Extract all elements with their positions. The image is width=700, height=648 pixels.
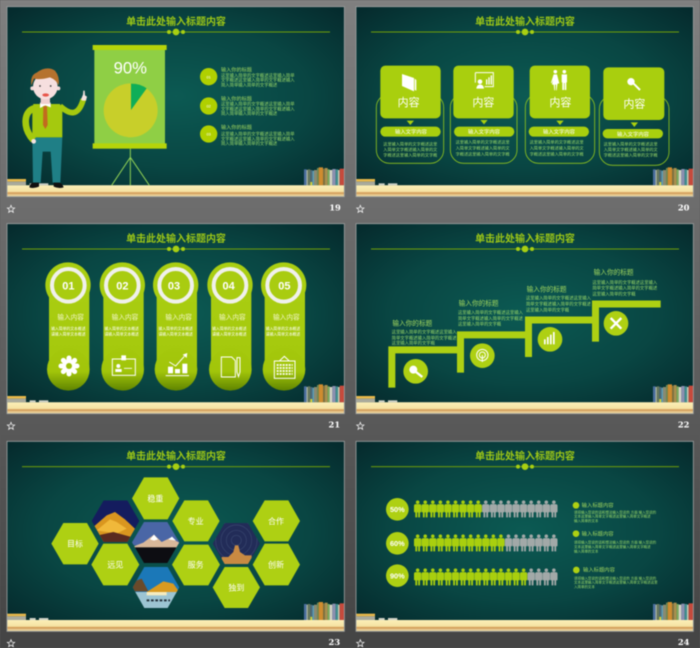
- title: 单击此处输入标题内容: [475, 232, 575, 245]
- hexagon: 创新: 创新: [268, 560, 284, 570]
- list item 03: 输入你的标题: [221, 123, 252, 131]
- card 4: 这里输入简单的文字概述这里: [604, 140, 658, 146]
- list item 01: 输入你的标题: [221, 65, 252, 73]
- pictogram row 50%: 50%: [390, 505, 405, 514]
- step 4: 简单文字概述输入简单的文字概述: [592, 285, 658, 292]
- illustration: teacher: [26, 68, 87, 188]
- pill 01: 输入内容: [57, 312, 84, 321]
- pill 03: 请输入简单文本概述: [158, 332, 193, 337]
- legend 2: 请将输入您说的话和想法输入您说的 方面 输入您说的: [574, 540, 657, 545]
- title: 单击此处输入标题内容: [126, 232, 226, 245]
- photo: lake: [133, 567, 179, 608]
- step 3: 输入你的标题: [527, 284, 567, 293]
- icon: star: [357, 205, 364, 212]
- legend 2: 输入标题内容: [582, 529, 614, 537]
- pill 01: 请输入简单文本概述: [51, 332, 86, 337]
- photo: star trails temple: [213, 520, 260, 564]
- list item 02: 简入简单输入简单的文字概述: [221, 110, 278, 117]
- step 3: 这里输入简单的文字概述这里输入: [526, 295, 592, 302]
- card 4: 内容: [623, 97, 645, 111]
- legend 1: [573, 501, 657, 523]
- hexagon: 独到: [213, 567, 260, 608]
- card 4: [599, 67, 669, 165]
- legend 2: 输入简单的文本: [574, 548, 599, 553]
- legend 1: 文本这里输入简单文字概述这里输入简单文字概述: [574, 514, 651, 519]
- panel: slide 21 five pills: [7, 224, 344, 430]
- pill 04: 输入简单的文本概述: [212, 326, 247, 331]
- step 4: 输入你的标题: [594, 268, 634, 277]
- title: 单击此处输入标题内容: [475, 449, 575, 462]
- pill 02: 02: [116, 280, 128, 292]
- pill 04: 输入内容: [219, 312, 246, 321]
- hexagon: 服务: [172, 545, 220, 585]
- card 1: 这里输入简单的文字概述这里: [383, 140, 437, 146]
- card 2: 入简单文字概述输入简单的文: [456, 145, 510, 151]
- card 1: 入简单文字概述输入简单的文: [383, 146, 437, 152]
- step 1: [392, 318, 457, 384]
- list item 01: 01: [206, 74, 212, 79]
- card 2: 内容: [472, 95, 494, 109]
- list item 03: [200, 123, 295, 147]
- step 4: [592, 268, 658, 336]
- pill 03: 03: [168, 280, 180, 292]
- hexagon: 专业: [172, 500, 220, 541]
- step 3: 这里输入简单的文字概: [526, 306, 570, 313]
- staircase line: [392, 304, 661, 388]
- step 4: 这里输入简单的文字概述这里输入: [592, 279, 658, 286]
- pictogram row 60%: 60%: [390, 539, 405, 548]
- icon: star: [357, 640, 364, 647]
- page number: 19: [329, 202, 341, 212]
- pill 04: [207, 262, 253, 391]
- card 3: 这里输入简单的文字概述这里: [530, 139, 584, 145]
- card 3: 内容: [549, 95, 571, 109]
- list item 03: 03: [206, 132, 212, 137]
- list item 03: 这里输入简单的文字概述这里输入简单: [221, 131, 295, 138]
- hexagon: 创新: [253, 544, 300, 585]
- pill 03: [153, 262, 198, 391]
- legend 3: 请将输入您说的话和想法输入您说的 方面 输入您说的: [574, 575, 657, 580]
- hexagon: 目标: 目标: [67, 539, 83, 549]
- page number: 22: [678, 420, 690, 430]
- title: 单击此处输入标题内容: [126, 15, 226, 28]
- pill 01: 01: [62, 280, 74, 292]
- icon: star: [7, 422, 15, 429]
- pill 05: 请输入简单文本概述: [266, 332, 300, 337]
- photo: snow peaks: [132, 522, 179, 564]
- page number: 20: [678, 202, 690, 212]
- page number: 24: [678, 637, 690, 647]
- pill 02: [100, 262, 145, 391]
- card 1: 字概述这里输入简单的文字概: [383, 151, 437, 157]
- legend 2: 文本这里输入简单文字概述这里输入简单文字概述: [574, 544, 651, 549]
- icon: star: [357, 422, 364, 429]
- title: 单击此处输入标题内容: [475, 15, 575, 28]
- list item 01: [200, 65, 295, 88]
- hexagon: 目标: [51, 523, 99, 564]
- pill 03: 输入内容: [165, 312, 192, 321]
- step 2: 这里输入简单的文字概述这里输入: [458, 309, 524, 316]
- flip chart: 90%: [114, 59, 147, 78]
- photo: golden mountain: [92, 500, 139, 542]
- icon: star: [7, 640, 15, 647]
- hexagon: 稳重: [132, 477, 179, 519]
- list item 01: 简入简单输入简单的文字概述: [221, 81, 278, 88]
- pill 04: 请输入简单文本概述: [212, 332, 247, 337]
- card 2: 字概述这里输入简单的文字概: [456, 150, 510, 156]
- pill 02: 输入内容: [112, 312, 139, 321]
- icon: star: [7, 205, 15, 212]
- step 1: 这里输入简单的文字概: [392, 340, 436, 347]
- card 3: 入简单文字概述输入简单的文: [530, 145, 584, 151]
- legend 3: 输入标题内容: [583, 566, 616, 574]
- pill 01: [45, 262, 91, 391]
- card 4: 输入文字内容: [617, 130, 650, 138]
- pill 01: 输入简单的文本概述: [51, 326, 86, 331]
- list item 03: 简入简单输入简单的文字概述: [221, 140, 278, 147]
- hexagon: 远见: [91, 544, 139, 585]
- card 3: 字概述这里输入简单的文字概: [530, 150, 584, 156]
- card 4: 入简单文字概述输入简单的文: [604, 146, 658, 152]
- pictogram row 90%: [386, 564, 558, 587]
- card 3: [525, 66, 595, 163]
- title: 单击此处输入标题内容: [126, 449, 226, 462]
- hexagon: 专业: 专业: [188, 516, 204, 526]
- legend 2: [573, 529, 657, 553]
- pictogram row 90%: 90%: [390, 571, 405, 580]
- list item 01: 这里输入简单的文字概述这里输入简单: [221, 72, 295, 79]
- pictogram row 60%: [386, 532, 558, 555]
- panel: slide 24 pictogram chart: [356, 441, 693, 647]
- list item 02: 02: [206, 104, 212, 109]
- pill 04: 04: [223, 280, 236, 292]
- pill 03: 输入简单的文本概述: [158, 326, 193, 331]
- pill 05: 输入内容: [273, 312, 300, 321]
- step 3: [526, 284, 592, 352]
- panel: slide 20 four cards: [356, 7, 693, 212]
- step 4: 这里输入简单的文字概: [592, 290, 636, 297]
- card 1: 输入文字内容: [395, 128, 428, 136]
- hexagon: 独到: 独到: [228, 582, 244, 592]
- card 2: 输入文字内容: [468, 128, 501, 136]
- list item 02: [200, 94, 295, 117]
- card 4: 字概述这里输入简单的文字概: [604, 152, 658, 158]
- legend 1: 输入简单的文本: [574, 518, 599, 523]
- list item 02: 这里输入简单的文字概述这里输入简单: [221, 101, 295, 108]
- card 1: 内容: [398, 95, 420, 109]
- step 3: 简单文字概述输入简单的文字概述: [526, 301, 592, 308]
- page number: 21: [329, 420, 340, 430]
- pictogram row 50%: [386, 498, 558, 521]
- pill 02: 请输入简单文本概述: [104, 332, 139, 337]
- step 2: [458, 299, 524, 368]
- legend 1: 输入标题内容: [582, 501, 614, 509]
- card 2: [450, 66, 517, 163]
- panel: slide 22 staircase: [356, 224, 693, 430]
- card 2: 这里输入简单的文字概述这里: [456, 139, 510, 145]
- step 1: 简单文字概述输入简单的文字概述: [392, 334, 457, 341]
- legend 3: [573, 566, 658, 589]
- legend 3: 文本这里输入简单文字概述这里输入简单文字概述这里: [574, 580, 658, 585]
- flip chart: [93, 45, 167, 185]
- step 1: 这里输入简单的文字概述这里输入: [392, 329, 457, 336]
- legend 3: 入简单的文本: [574, 584, 595, 589]
- list item 03: 文字概述这里输入简单的文字概述输入: [221, 135, 295, 142]
- hexagon: 稳重: 稳重: [147, 493, 163, 503]
- card 3: 输入文字内容: [543, 128, 576, 136]
- page number: 23: [329, 637, 340, 647]
- step 1: 输入你的标题: [392, 318, 433, 327]
- pill 05: 输入简单的文本概述: [266, 326, 300, 331]
- panel: slide 23 hexagons: [7, 441, 344, 647]
- hexagon: 服务: 服务: [188, 560, 204, 570]
- pill 05: 05: [278, 280, 290, 292]
- step 2: 这里输入简单的文字概: [458, 321, 502, 328]
- panel: slide 19 presentation: [7, 7, 344, 212]
- legend 1: 请将输入您说的话和想法输入您说的 方面 输入您说的: [574, 509, 657, 514]
- list item 01: 文字概述这里输入简单的文字概述输入: [221, 77, 295, 84]
- pill 05: [261, 262, 306, 391]
- card 1: [376, 66, 444, 163]
- pill 02: 输入简单的文本概述: [104, 326, 139, 331]
- hexagon: 合作: 合作: [268, 516, 284, 526]
- step 2: 简单文字概述输入简单的文字概述: [458, 315, 524, 322]
- list item 02: 输入你的标题: [221, 94, 252, 102]
- hexagon: 远见: 远见: [107, 561, 123, 570]
- hexagon: 合作: [253, 500, 300, 541]
- step 2: 输入你的标题: [459, 299, 499, 308]
- list item 02: 文字概述这里输入简单的文字概述输入: [221, 105, 295, 112]
